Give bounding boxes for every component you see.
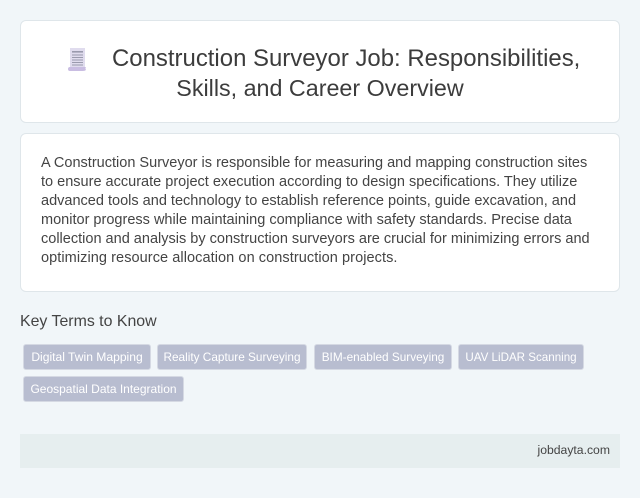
heading: key terms: Key Terms to Know [20, 313, 157, 330]
tag [23, 376, 184, 402]
panel: title header [20, 20, 620, 123]
tag: BIM-enabled Surveying [322, 350, 444, 364]
tag [157, 344, 307, 370]
tag: Reality Capture Surveying [163, 350, 301, 364]
description text [41, 155, 590, 266]
tag list [23, 344, 584, 402]
tag: Geospatial Data Integration [30, 382, 177, 396]
description text: optimizing resource allocation on construction projects. [41, 250, 398, 266]
tag [458, 344, 584, 370]
description text: advanced tools and technology to establish reference points, guide excavation, and [41, 193, 576, 209]
description text: monitor progress while maintaining compliance with safety standards. Precise data [41, 212, 572, 228]
footer credit: jobdayta.com [538, 443, 610, 457]
description text: A Construction Surveyor is responsible for measuring and mapping construction sites [41, 155, 587, 171]
footer bar [20, 434, 620, 468]
tag: Digital Twin Mapping [31, 350, 143, 364]
title: Skills, and Career Overview [176, 75, 464, 101]
icon: survey document scroll [68, 48, 86, 71]
tag [23, 344, 151, 370]
title [112, 45, 580, 101]
description text: to ensure accurate project execution according to design specifications. They utilize [41, 174, 577, 190]
tag [314, 344, 452, 370]
description text: collection and analysis by construction surveyors are crucial for minimizing errors and [41, 231, 590, 247]
tag: UAV LiDAR Scanning [465, 351, 577, 364]
title: Construction Surveyor Job: Responsibilities, [112, 45, 580, 72]
panel: description [20, 133, 620, 292]
